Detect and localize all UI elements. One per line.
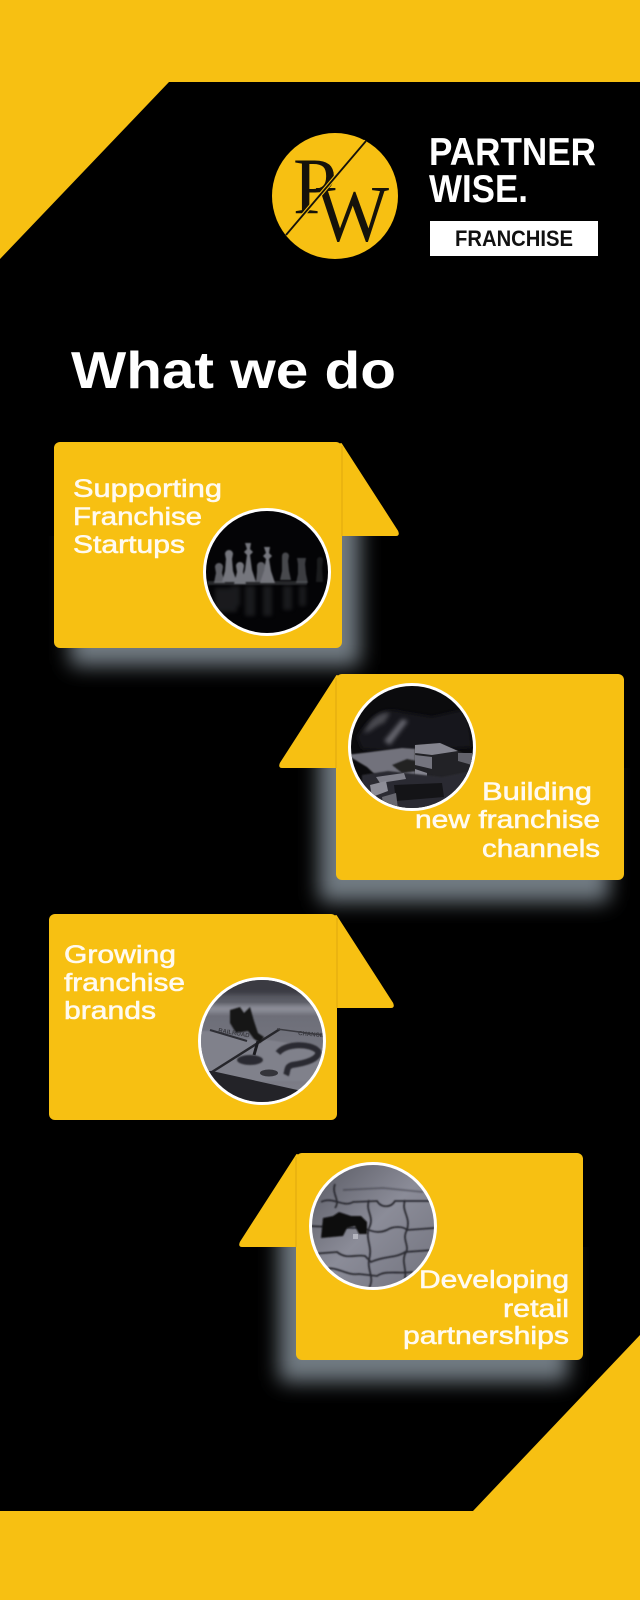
label: developing retail partnerships: partnerships — [403, 1322, 569, 1350]
label: building new franchise channels — [415, 778, 600, 863]
heading: What we do — [71, 342, 396, 400]
photo: chess pieces — [202, 507, 332, 637]
photo: stacking wooden blocks — [347, 682, 477, 812]
label: developing retail partnerships: Developing — [419, 1266, 569, 1294]
label: building new franchise channels: new franchise — [415, 806, 600, 834]
photo: monopoly board: RAILROAD — [218, 1028, 251, 1040]
bottom yellow corner shape — [0, 1335, 640, 1600]
label: supporting franchise startups: Startups — [73, 531, 185, 559]
logo: PARTNER WISE wordmark — [429, 131, 596, 211]
label: developing retail partnerships: retail — [503, 1295, 569, 1323]
photo: monopoly board: CHANCE — [298, 1031, 324, 1039]
label: building new franchise channels: channels — [482, 835, 600, 863]
panel: building new franchise channels — [280, 674, 624, 902]
logo: PARTNER WISE wordmark: WISE. — [429, 168, 528, 211]
logo: FRANCHISE tag — [430, 221, 598, 256]
label: building new franchise channels: Building — [482, 778, 592, 806]
label: developing retail partnerships — [403, 1266, 569, 1350]
label: growing franchise brands: brands — [64, 997, 156, 1025]
photo: jigsaw puzzle — [308, 1161, 438, 1291]
logo: PW circle emblem: P — [293, 143, 337, 231]
photo: monopoly board — [197, 976, 327, 1106]
logo: PW circle emblem — [272, 133, 398, 259]
panel: supporting franchise startups — [54, 442, 398, 666]
logo: PARTNER WISE wordmark: PARTNER — [429, 131, 596, 174]
panel: growing franchise brands — [49, 914, 393, 1120]
label: supporting franchise startups: Franchise — [73, 503, 202, 531]
label: growing franchise brands: Growing — [64, 941, 176, 969]
label: growing franchise brands — [64, 941, 185, 1025]
logo: FRANCHISE tag: FRANCHISE — [455, 226, 573, 251]
label: growing franchise brands: franchise — [64, 969, 185, 997]
label: supporting franchise startups: Supporting — [73, 475, 222, 503]
label: supporting franchise startups — [73, 475, 222, 559]
panel: developing retail partnerships — [240, 1153, 583, 1382]
logo: PW circle emblem: W — [316, 171, 389, 259]
top yellow corner shape — [0, 0, 640, 259]
